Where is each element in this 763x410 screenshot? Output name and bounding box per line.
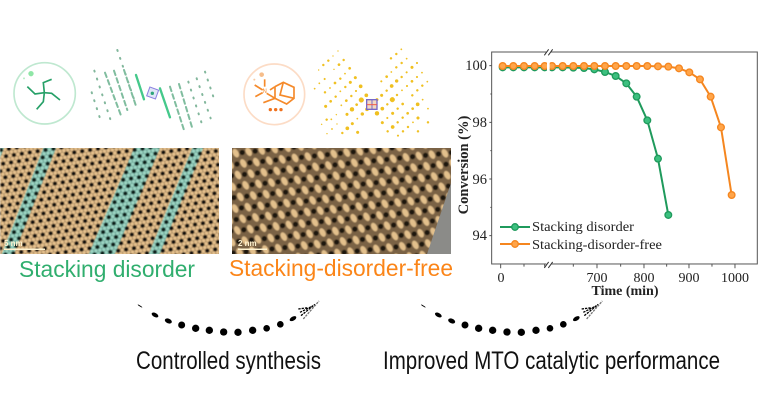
x axis tick labels: 900 [678,271,700,286]
arrow: right dotted arc [421,301,602,336]
y axis tick labels: 94 [472,228,488,244]
series: stacking disorder [499,64,672,218]
chart frame and ticks [489,49,757,268]
x axis tick labels: 0 [498,271,504,286]
diffraction: green lattice [92,50,213,130]
heading: stacking disorder: Stacking disorder [19,256,195,282]
micrograph: stacking disorder [0,146,221,256]
diffraction: yellow lattice [314,49,429,136]
icon: unit cell box [367,100,377,109]
micrograph: stacking disorder: 5 nm [4,239,23,248]
panel: stacking-disorder-free structure [244,49,429,136]
x axis tick labels: 700 [586,271,608,286]
y axis title: Conversion (%) [456,115,472,214]
caption: controlled synthesis: Controlled synthesis [136,347,321,375]
y axis tick labels: 98 [472,115,487,131]
x axis tick labels: 1000 [721,271,749,286]
legend: Stacking disorder [532,219,635,234]
y axis tick labels [465,58,488,244]
heading: stacking-disorder-free: Stacking-disorder-free [229,255,453,281]
line chart: conversion vs time [456,49,757,299]
x axis tick labels [498,271,749,286]
icon: green molecule in circle [14,63,75,124]
legend [500,219,662,252]
arrow: left dotted arc [137,301,319,336]
icon: orange molecule in circle [244,64,305,125]
micrograph: stacking-disorder-free: 2 nm [238,239,257,248]
x axis tick labels: 800 [634,271,654,286]
panel: stacking disorder structure [14,50,213,130]
icon: unit cell box [147,87,159,99]
icon: orange molecule in circle: N [262,89,267,95]
legend: Stacking-disorder-free [532,237,662,252]
y axis tick labels: 100 [465,58,487,74]
micrograph: stacking-disorder-free [230,146,453,256]
y axis tick labels: 96 [472,172,487,188]
series: stacking-disorder-free [499,60,735,198]
x axis title: Time (min) [591,284,659,299]
